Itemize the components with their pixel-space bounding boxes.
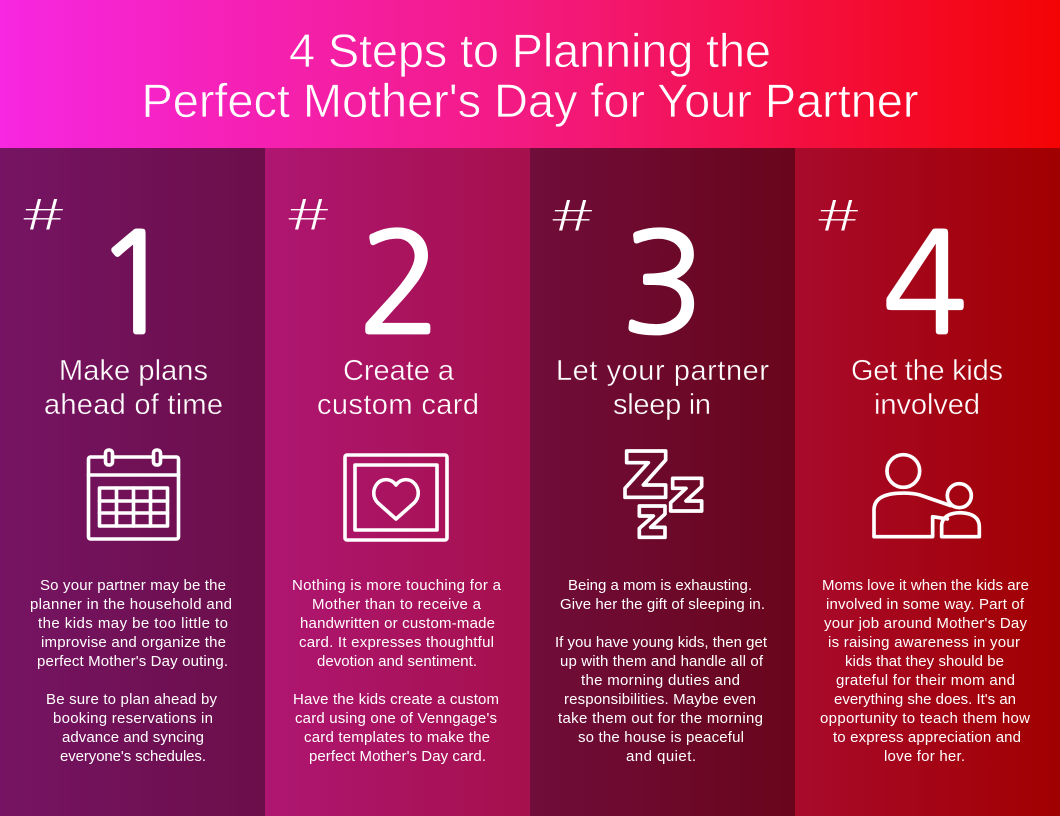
step 4 body text: involved in some way. Part of <box>826 596 1025 613</box>
panel: step 1 <box>0 148 265 816</box>
step 4 number: 4 <box>883 214 967 352</box>
step 2 body text: Nothing is more touching for a <box>292 577 502 594</box>
step 2 body text: perfect Mother's Day card. <box>309 748 486 765</box>
step 2 body text <box>292 577 502 765</box>
step 3 body text <box>555 577 768 765</box>
step 2 number: 2 <box>358 214 442 352</box>
step 1 body text: the kids may be too little to <box>38 615 228 632</box>
step 4 body text: love for her. <box>884 748 965 765</box>
step 1 body text: advance and syncing <box>62 729 204 746</box>
step 3 hash mark: # <box>548 196 596 238</box>
step 1 body text <box>30 577 232 765</box>
step 4 body text: opportunity to teach them how <box>820 710 1030 727</box>
step 4 body text: to express appreciation and <box>833 729 1021 746</box>
header banner <box>0 0 1060 148</box>
step 2 body text: Mother than to receive a <box>312 596 482 613</box>
title: Perfect Mother's Day for Your Partner <box>142 74 918 127</box>
step 2 body text: devotion and sentiment. <box>317 653 477 670</box>
step 1 body text: perfect Mother's Day outing. <box>37 653 228 670</box>
step 3 body text: Give her the gift of sleeping in. <box>560 596 765 613</box>
step 1 body text: Be sure to plan ahead by <box>46 691 218 708</box>
icon: parent and child <box>874 455 979 537</box>
step 1 number: 1 <box>93 214 177 352</box>
step 1 hash mark: # <box>19 195 67 237</box>
icon: card with heart <box>345 455 447 540</box>
step 4 body text: kids that they should be <box>845 653 1004 670</box>
step 4 body text: grateful for their mom and <box>836 672 1015 689</box>
step 3 body text: so the house is peaceful <box>578 729 744 746</box>
step 3 body text: up with them and handle all of <box>560 653 764 670</box>
step 4 body text: your job around Mother's Day <box>824 615 1028 632</box>
step 4 body text: everything she does. It's an <box>834 691 1016 708</box>
icon: sleeping Zzz <box>625 451 702 537</box>
step 2 heading: Create a <box>343 355 455 387</box>
step 2 body text: card templates to make the <box>304 729 490 746</box>
step 4 body text: is raising awareness in your <box>828 634 1020 651</box>
step 1 heading <box>44 355 223 421</box>
panel: step 3 <box>530 148 795 816</box>
step 4 heading: Get the kids <box>851 355 1003 387</box>
step 2 body text: card. It expresses thoughtful <box>299 634 494 651</box>
step 3 number: 3 <box>621 214 705 352</box>
step 3 heading: sleep in <box>613 389 711 421</box>
step 3 body text: responsibilities. Maybe even <box>564 691 756 708</box>
step 3 body text: and quiet. <box>626 748 696 765</box>
step 3 body text: the morning duties and <box>581 672 740 689</box>
title <box>142 24 918 127</box>
step 3 heading: Let your partner <box>556 355 769 387</box>
step 4 body text <box>820 577 1030 765</box>
step 1 heading: ahead of time <box>44 389 223 421</box>
step 2 body text: card using one of Venngage's <box>295 710 497 727</box>
step 2 heading <box>317 355 479 421</box>
step 1 body text: planner in the household and <box>30 596 232 613</box>
step 1 body text: everyone's schedules. <box>60 748 206 765</box>
step 3 body text: take them out for the morning <box>558 710 763 727</box>
step 2 hash mark: # <box>284 195 332 237</box>
step 4 heading <box>851 355 1003 421</box>
step 1 body text: booking reservations in <box>53 710 213 727</box>
icon: calendar <box>88 450 178 539</box>
panel: step 2 <box>265 148 530 816</box>
step 2 body text: handwritten or custom-made <box>300 615 495 632</box>
step 2 body text: Have the kids create a custom <box>293 691 499 708</box>
step 4 body text: Moms love it when the kids are <box>822 577 1029 594</box>
panel: step 4 <box>795 148 1060 816</box>
step 4 hash mark: # <box>814 196 862 238</box>
step 1 body text: So your partner may be the <box>40 577 226 594</box>
step 3 body text: If you have young kids, then get <box>555 634 768 651</box>
step 4 heading: involved <box>874 389 980 421</box>
step 3 heading <box>556 355 769 421</box>
step 1 heading: Make plans <box>59 355 208 387</box>
title: 4 Steps to Planning the <box>289 24 771 77</box>
step 1 body text: improvise and organize the <box>41 634 226 651</box>
step 2 heading: custom card <box>317 389 479 421</box>
step 3 body text: Being a mom is exhausting. <box>568 577 752 594</box>
